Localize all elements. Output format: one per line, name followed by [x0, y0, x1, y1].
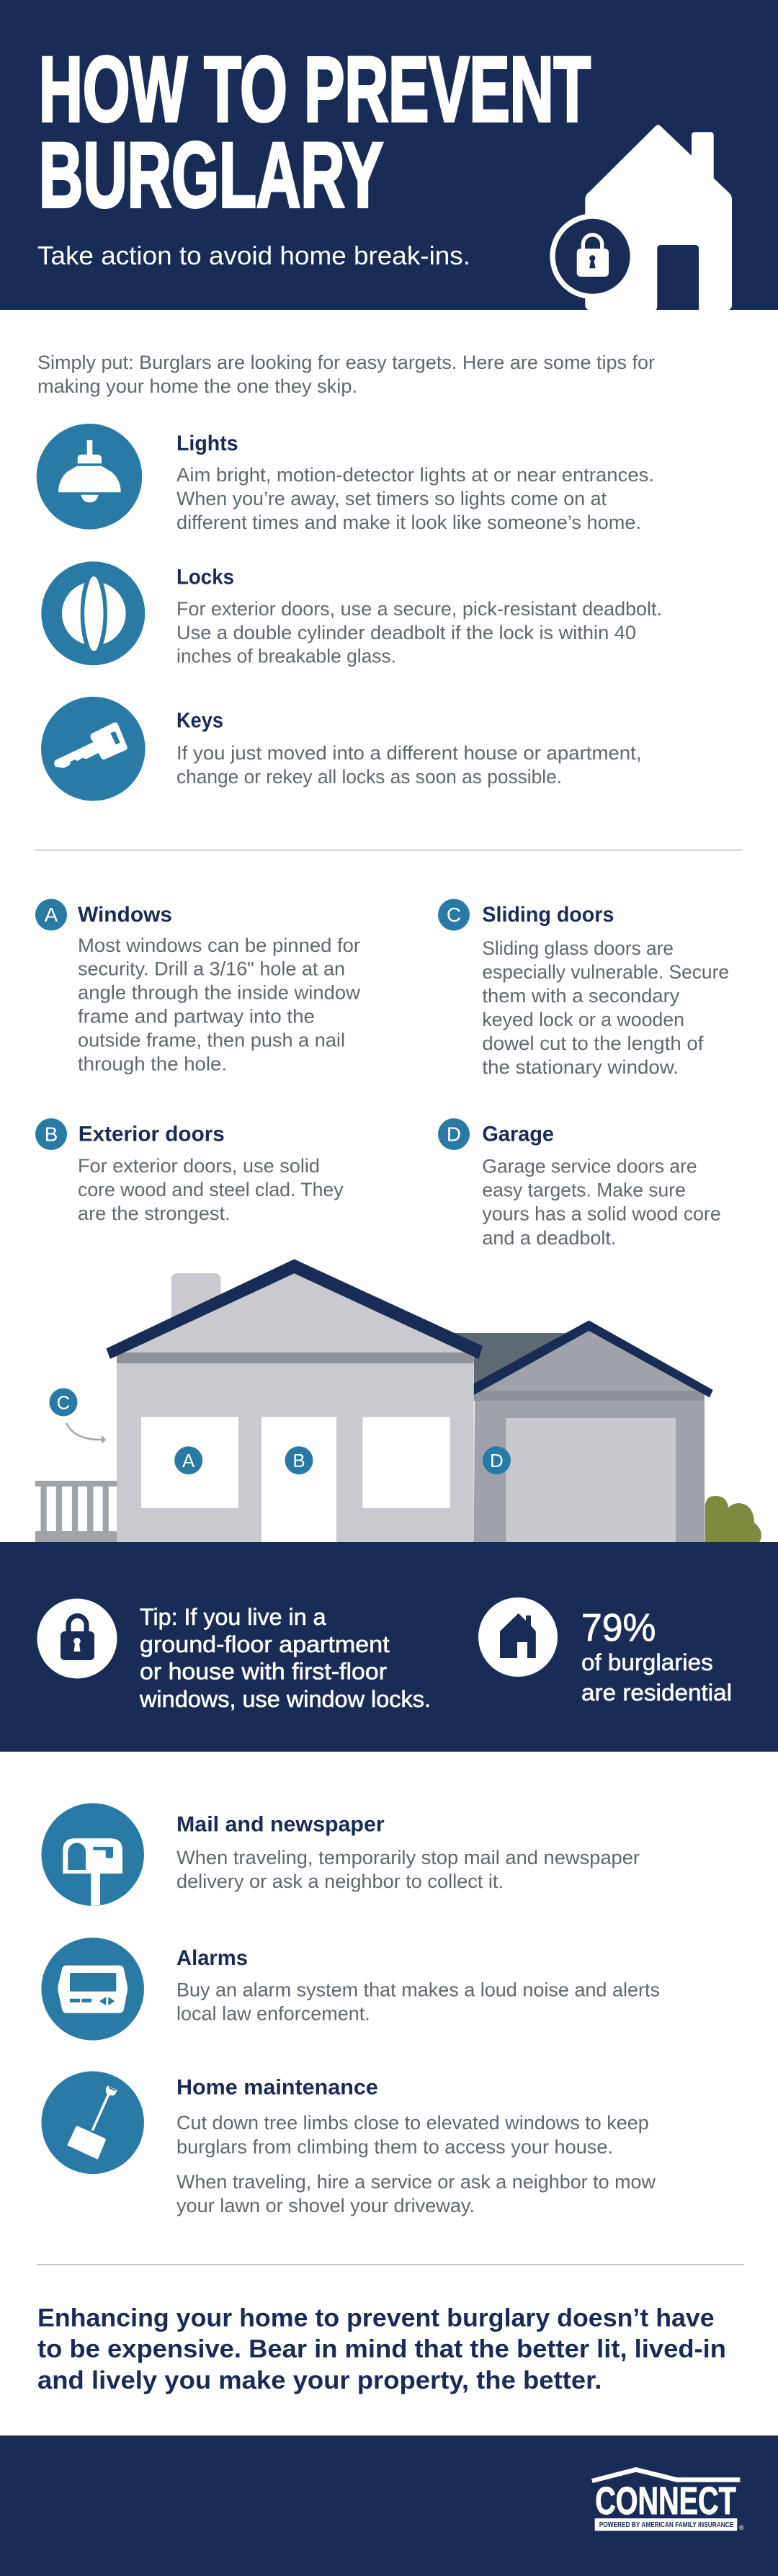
intro text: making your home the one they skip.	[37, 375, 357, 397]
heading: garage: Garage	[482, 1123, 554, 1146]
panel: home maintenance	[41, 2071, 656, 2216]
text: alarms	[176, 1979, 660, 2025]
text: mail: When traveling, temporarily stop mail and newspaper	[176, 1847, 640, 1868]
text: stat caption: are residential	[581, 1680, 732, 1706]
icon: snow shovel	[41, 2071, 144, 2174]
text: exterior doors: core wood and steel clad. They	[78, 1179, 344, 1200]
text: home maintenance: your lawn or shovel your driveway.	[176, 2195, 475, 2216]
heading: alarms: Alarms	[176, 1946, 248, 1970]
icon: alarm panel	[41, 1938, 144, 2041]
badge: B	[35, 1118, 67, 1150]
logo: Connect: ®	[739, 2524, 744, 2531]
text: sliding doors: Sliding glass doors are	[482, 937, 674, 959]
icon: key	[41, 697, 146, 801]
text: exterior doors: For exterior doors, use solid	[78, 1155, 320, 1177]
badge: D: D	[447, 1123, 461, 1146]
heading: mail and newspaper: Mail and newspaper	[176, 1813, 385, 1837]
text: garage	[482, 1156, 721, 1249]
text: locks: Use a double cylinder deadbolt if the lock is within 40	[176, 622, 636, 643]
main house	[106, 1260, 483, 1542]
garage	[474, 1320, 713, 1542]
text: exterior doors: are the strongest.	[78, 1203, 231, 1224]
panel: mail and newspaper	[41, 1803, 640, 1906]
text: locks: inches of breakable glass.	[176, 646, 396, 667]
heading: locks: Locks	[176, 565, 234, 589]
badge: A	[35, 899, 67, 931]
text: sliding doors: dowel cut to the length of	[482, 1033, 704, 1054]
text: garage: yours has a solid wood core	[482, 1203, 721, 1225]
panel: alarms	[41, 1938, 660, 2041]
panel: keys	[41, 697, 641, 801]
text: garage: easy targets. Make sure	[482, 1180, 686, 1201]
text: sliding doors: especially vulnerable. Secure	[482, 961, 729, 983]
text: keys: If you just moved into a different house or apartment,	[176, 742, 641, 764]
text: locks: For exterior doors, use a secure, pick-resistant deadbolt.	[176, 598, 662, 620]
text: exterior doors	[78, 1155, 344, 1224]
text: home maintenance: Cut down tree limbs close to elevated windows to keep	[176, 2112, 649, 2134]
badge: B on house: B	[292, 1450, 305, 1471]
text: garage: Garage service doors are	[482, 1156, 697, 1177]
text: windows: through the hole.	[78, 1053, 227, 1075]
text: windows	[78, 935, 361, 1075]
badge: C on house: C	[57, 1391, 70, 1413]
badge: A on house: A	[182, 1450, 195, 1471]
heading: exterior doors: Exterior doors	[79, 1123, 225, 1146]
heading: lights: Lights	[176, 432, 238, 455]
logo: Connect	[591, 2467, 744, 2531]
text: tip: Tip: If you live in a	[140, 1604, 326, 1630]
icon: hanging lamp	[37, 424, 142, 530]
badge: A on house	[174, 1446, 202, 1474]
badge: B: B	[45, 1123, 58, 1146]
icon: mailbox	[41, 1803, 144, 1906]
text: sliding doors: the stationary window.	[482, 1056, 679, 1078]
panel: header	[0, 0, 778, 310]
panel: garage	[438, 1118, 721, 1249]
closing statement: to be expensive. Bear in mind that the better lit, lived-in	[37, 2335, 726, 2363]
badge: C	[438, 899, 470, 931]
text: lights: different times and make it look like someone’s home.	[176, 512, 641, 533]
panel: windows	[35, 899, 361, 1075]
text: lights	[176, 464, 654, 533]
badge: B on house	[285, 1446, 313, 1474]
text: home maintenance: When traveling, hire a service or ask a neighbor to mow	[176, 2171, 656, 2193]
panel: lights	[37, 424, 654, 533]
title: BURGLARY	[39, 124, 383, 227]
text: tip: ground-floor apartment	[140, 1631, 390, 1657]
text: alarms: Buy an alarm system that makes a loud noise and alerts	[176, 1979, 660, 2000]
heading: keys: Keys	[176, 709, 223, 732]
heading: windows: Windows	[78, 903, 172, 927]
icon: deadbolt lock	[41, 561, 145, 665]
text: tip: windows, use window locks.	[139, 1686, 431, 1712]
heading: sliding doors: Sliding doors	[482, 903, 614, 927]
text: windows: security. Drill a 3/16" hole at an	[78, 958, 345, 980]
text: mail: delivery or ask a neighbor to collect it.	[176, 1871, 504, 1892]
panel: tip band	[0, 1542, 778, 1752]
text: home maintenance	[176, 2112, 656, 2216]
text: sliding doors	[482, 937, 729, 1078]
badge: A: A	[45, 904, 58, 926]
text: garage: and a deadbolt.	[482, 1227, 616, 1249]
panel: locks	[41, 561, 662, 667]
text: stat caption	[581, 1649, 732, 1706]
text: mail	[176, 1847, 640, 1892]
title	[39, 38, 591, 227]
badge: C: C	[447, 904, 461, 926]
badge: D on house	[483, 1446, 511, 1474]
closing statement	[37, 2304, 726, 2394]
bush	[705, 1496, 761, 1542]
subtitle: Take action to avoid home break-ins.	[37, 241, 470, 270]
text: sliding doors: them with a secondary	[482, 985, 680, 1007]
text: windows: outside frame, then push a nail	[78, 1029, 345, 1051]
closing statement: and lively you make your property, the better.	[37, 2366, 602, 2394]
text: tip: or house with first-floor	[140, 1659, 387, 1685]
text: keys	[176, 742, 641, 788]
icon: padlock	[37, 1598, 117, 1679]
badge: D	[438, 1118, 470, 1150]
text: home maintenance: burglars from climbing them to access your house.	[176, 2136, 613, 2157]
intro text	[37, 352, 655, 397]
closing statement: Enhancing your home to prevent burglary doesn’t have	[37, 2304, 715, 2332]
text: windows: frame and partway into the	[78, 1006, 315, 1028]
text: tip	[139, 1604, 431, 1712]
badge: C on house	[49, 1388, 78, 1417]
logo: Connect: POWERED BY AMERICAN FAMILY INSURANCE	[599, 2521, 734, 2529]
text: windows: angle through the inside window	[78, 981, 361, 1003]
text: windows: Most windows can be pinned for	[78, 935, 360, 956]
chimney	[171, 1273, 220, 1326]
text: stat caption: of burglaries	[581, 1649, 713, 1675]
panel: footer	[0, 2435, 778, 2576]
railing	[35, 1481, 117, 1542]
garage roof back	[454, 1333, 565, 1391]
arrow	[66, 1423, 106, 1444]
text: alarms: local law enforcement.	[176, 2003, 370, 2025]
text: lights: Aim bright, motion-detector lights at or near entrances.	[176, 464, 654, 486]
badge: D on house: D	[490, 1450, 504, 1471]
text: keys: change or rekey all locks as soon as possible.	[176, 766, 562, 788]
intro text: Simply put: Burglars are looking for easy targets. Here are some tips for	[37, 352, 655, 373]
stat: 79%: 79%	[581, 1606, 656, 1649]
illustration: house	[35, 1260, 761, 1542]
panel: sliding doors	[438, 899, 729, 1078]
icon: house with padlock	[550, 125, 732, 310]
text: sliding doors: keyed lock or a wooden	[482, 1009, 684, 1030]
text: lights: When you’re away, set timers so lights come on at	[176, 488, 607, 509]
panel: exterior doors	[35, 1118, 344, 1224]
text: locks	[176, 598, 662, 667]
icon: house	[478, 1597, 558, 1677]
heading: home maintenance: Home maintenance	[176, 2075, 378, 2099]
